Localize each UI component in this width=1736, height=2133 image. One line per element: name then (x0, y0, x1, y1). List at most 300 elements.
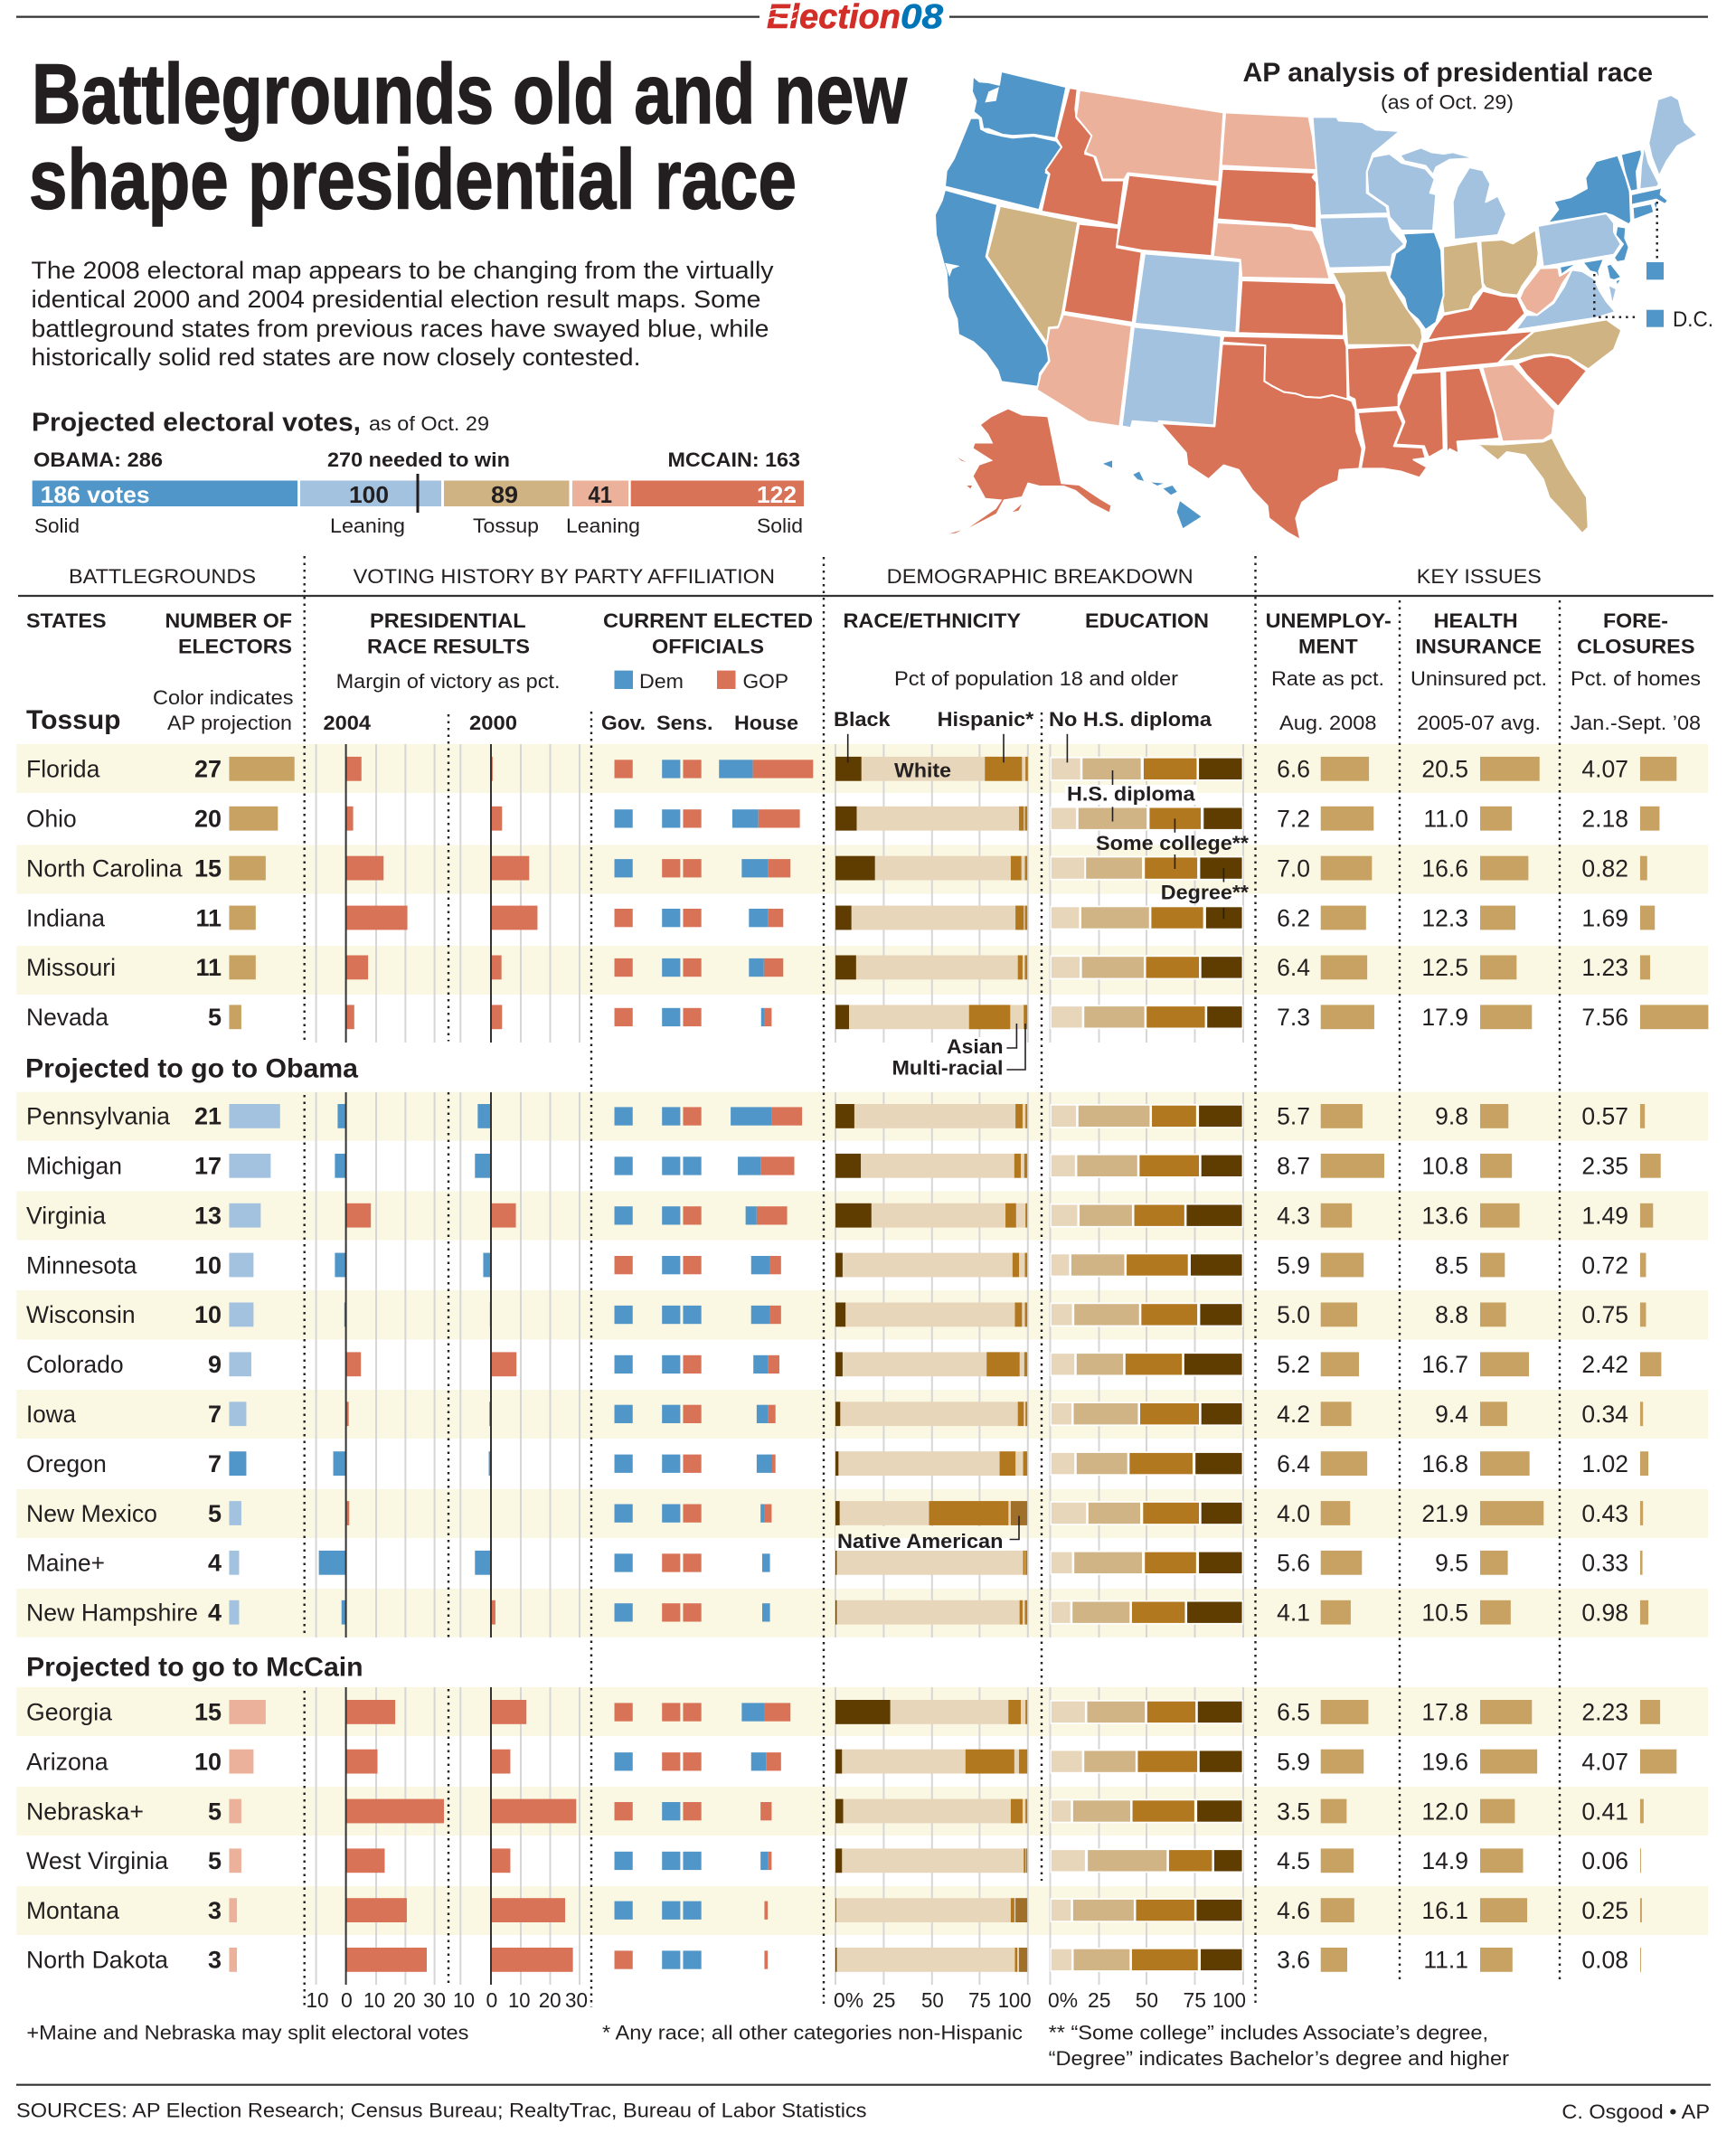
column headers: OFFICIALS (652, 635, 764, 658)
elector bar (229, 1600, 239, 1625)
totals labels: MCCAIN: 163 (667, 448, 800, 471)
row: West Virginia (26, 1847, 1641, 1874)
axis labels: percent: 75 (968, 1988, 991, 2012)
race bar (835, 906, 1027, 930)
sources and credit (16, 2100, 1710, 2123)
issue values (1277, 1748, 1628, 1775)
row: Wisconsin (26, 1301, 1646, 1328)
issue values (1277, 1699, 1628, 1726)
state name: Nebraska+ (26, 1798, 144, 1825)
row: Florida (26, 756, 1676, 783)
issue values: 11.0 (1423, 806, 1468, 833)
issue values: 20.5 (1421, 756, 1468, 783)
axis labels: percent: 50 (921, 1988, 944, 2012)
issue values (1277, 1599, 1628, 1626)
intro paragraph (31, 257, 774, 371)
state name: New Mexico (26, 1500, 157, 1527)
elected officials (615, 1950, 768, 1969)
issue values: 3.5 (1277, 1798, 1310, 1825)
race bar (835, 856, 1027, 881)
elected officials (615, 1752, 781, 1770)
elected officials (615, 1703, 790, 1722)
race bar (835, 1005, 1027, 1029)
issue bars (1321, 1551, 1643, 1575)
stacked electoral bar: 186 votes (41, 481, 150, 508)
electors: 10 (194, 1301, 222, 1328)
elected officials (615, 1355, 779, 1373)
issue values (1277, 756, 1628, 783)
map: AP projection by state (935, 71, 1697, 540)
Rhode Island and D.C. callouts: D.C. (1673, 307, 1713, 332)
education bar (1051, 1005, 1243, 1029)
issue values: 4.07 (1581, 1748, 1628, 1775)
elector bar (229, 1352, 251, 1376)
margin bars (346, 1501, 349, 1525)
intro paragraph: battleground states from previous races have swayed blue, while (31, 315, 769, 342)
margin bars (337, 1104, 491, 1128)
issue bars (1321, 807, 1659, 831)
axis labels: percent: 0% (834, 1988, 863, 2012)
education bar (1051, 856, 1243, 881)
race bar (835, 1750, 1027, 1774)
issue values (1277, 1401, 1628, 1428)
issue values: 16.1 (1421, 1897, 1468, 1924)
state name: Ohio (26, 806, 77, 833)
race bar (835, 1799, 1027, 1823)
state name: New Hampshire (26, 1599, 198, 1626)
issue values: 0.98 (1581, 1599, 1628, 1626)
issue values: 16.6 (1421, 854, 1468, 882)
race bar (835, 1302, 1027, 1326)
race bar (835, 1154, 1027, 1178)
issue values: 8.8 (1435, 1301, 1468, 1328)
education bar (1051, 1799, 1243, 1823)
issue bars (1321, 1203, 1653, 1228)
elector bar (229, 1104, 280, 1128)
race bar (835, 1948, 1027, 1972)
group heading: Obama: Projected to go to Obama (25, 1054, 358, 1084)
electoral votes heading: as of Oct. 29 (369, 412, 489, 435)
issue bars (1321, 1005, 1708, 1029)
education legend labels (1049, 708, 1249, 919)
section headings: VOTING HISTORY BY PARTY AFFILIATION (354, 565, 775, 588)
bar segment labels: Tossup (473, 514, 539, 537)
axis labels: percent: 75 (1183, 1988, 1206, 2012)
issue values: 8.7 (1277, 1153, 1310, 1180)
elector bar (229, 1501, 241, 1525)
education bar (1051, 1253, 1243, 1277)
electors: 11 (195, 954, 222, 981)
stacked electoral bar (33, 474, 804, 513)
column headers: RACE RESULTS (367, 635, 530, 658)
axis labels: margin of victory: 0 (486, 1988, 497, 2012)
issue values: 4.6 (1277, 1897, 1310, 1924)
state name: Michigan (26, 1153, 122, 1180)
column headers: CURRENT ELECTED (603, 609, 813, 632)
race bar (835, 1352, 1027, 1376)
title: shape presidential race (29, 132, 797, 226)
electors: 11 (195, 904, 222, 931)
elector bar (229, 807, 278, 831)
column sub-headers (153, 667, 1701, 734)
issue values: 5.9 (1277, 1748, 1310, 1775)
map heading (1242, 58, 1653, 114)
education legend labels: Some college** (1096, 832, 1249, 854)
issue values: 5.7 (1277, 1103, 1310, 1130)
issue bars (1321, 1750, 1676, 1774)
margin bars (334, 1451, 491, 1476)
elector bar (229, 1551, 239, 1575)
issue values: 13.6 (1421, 1202, 1468, 1229)
race bar (835, 1104, 1027, 1128)
state name: Iowa (26, 1401, 77, 1428)
race bar (835, 955, 1027, 979)
electors: 4 (208, 1550, 222, 1577)
elector bar (229, 955, 256, 979)
issue values: 8.5 (1435, 1251, 1468, 1279)
row: Indiana (26, 904, 1655, 931)
state name: Oregon (26, 1450, 107, 1477)
chart sub-headers: 2000 (469, 712, 517, 734)
issue values: 2.42 (1581, 1351, 1628, 1378)
stacked electoral bar: 41 (588, 481, 612, 508)
issue values: 9.8 (1435, 1103, 1468, 1130)
issue bars (1321, 757, 1676, 781)
electors: 5 (208, 1004, 222, 1031)
intro paragraph: historically solid red states are now closely contested. (31, 344, 640, 371)
issue values: 0.72 (1581, 1251, 1628, 1279)
row: Georgia (26, 1699, 1660, 1726)
electors: 9 (208, 1351, 222, 1378)
issue values: 7.0 (1277, 854, 1310, 882)
issue values: 4.2 (1277, 1401, 1310, 1428)
issue bars (1321, 1600, 1648, 1625)
column headers (26, 609, 1694, 658)
education bar (1051, 757, 1243, 781)
elected officials (615, 859, 790, 877)
stacked electoral bar: 89 (491, 481, 518, 508)
column sub-headers: AP projection (167, 712, 292, 734)
party legend: Dem (639, 670, 684, 693)
education legend labels: H.S. diploma (1067, 783, 1195, 805)
axis labels: margin of victory: 30 (423, 1988, 446, 2012)
issue values: 1.23 (1581, 954, 1628, 981)
education bar (1051, 1154, 1243, 1178)
issue values (1277, 1798, 1628, 1825)
issue values: 4.07 (1581, 756, 1628, 783)
title (29, 46, 908, 226)
row: Pennsylvania (26, 1103, 1645, 1130)
axis labels: percent: 100 (1212, 1988, 1246, 2012)
race bar (835, 1551, 1027, 1575)
education bar (1051, 1501, 1243, 1525)
row: Michigan (26, 1153, 1661, 1180)
issue values: 6.4 (1277, 954, 1310, 981)
state name: Arizona (26, 1748, 109, 1775)
elector bar (229, 1253, 253, 1277)
axis labels: percent (834, 1988, 1246, 2012)
issue values: 0.43 (1581, 1500, 1628, 1527)
issue values: 5.6 (1277, 1550, 1310, 1577)
elected officials (615, 1156, 795, 1175)
axis labels: percent: 50 (1136, 1988, 1158, 2012)
electors: 5 (208, 1798, 222, 1825)
elector bar (229, 1898, 237, 1922)
chart sub-headers (324, 712, 798, 734)
issue values: 7.2 (1277, 806, 1310, 833)
margin bars (346, 906, 537, 930)
elector bar (229, 1451, 246, 1476)
elector bar (229, 906, 256, 930)
column sub-headers: Aug. 2008 (1279, 712, 1376, 734)
stacked electoral bar: 100 (349, 481, 389, 508)
issue values: 0.57 (1581, 1103, 1628, 1130)
elector bar (229, 1948, 237, 1972)
issue values: 14.9 (1421, 1847, 1468, 1874)
intro paragraph: The 2008 electoral map appears to be changing from the virtually (31, 257, 774, 284)
issue values (1277, 1947, 1628, 1974)
margin bars (319, 1551, 491, 1575)
issue values: 0.41 (1581, 1798, 1628, 1825)
column sub-headers: Pct of population 18 and older (894, 667, 1178, 690)
row: Nebraska (26, 1798, 1644, 1825)
elector bar (229, 1799, 241, 1823)
margin bars (346, 807, 502, 831)
section headings: DEMOGRAPHIC BREAKDOWN (887, 565, 1194, 588)
intro paragraph: identical 2000 and 2004 presidential election result maps. Some (31, 286, 761, 313)
state name: Maine+ (26, 1550, 105, 1577)
margin bars (346, 1352, 516, 1376)
issue values: 17.9 (1421, 1004, 1468, 1031)
issue values: 5.9 (1277, 1251, 1310, 1279)
row: Iowa (26, 1401, 1643, 1428)
column headers: CLOSURES (1577, 635, 1694, 658)
electors: 27 (194, 756, 222, 783)
elected officials (615, 1852, 771, 1870)
issue values (1277, 1500, 1628, 1527)
race legend labels: Hispanic* (938, 708, 1034, 731)
column sub-headers: Pct. of homes (1571, 667, 1701, 690)
header rule (16, 16, 1708, 18)
title: Battlegrounds old and new (32, 46, 908, 141)
issue values: 11.1 (1423, 1947, 1468, 1974)
elected officials (615, 760, 813, 779)
elector bar (229, 1154, 270, 1178)
elected officials (615, 1206, 788, 1224)
issue bars (1321, 1700, 1660, 1724)
education bar (1051, 1104, 1243, 1128)
state name: Missouri (26, 954, 116, 981)
issue bars (1321, 1154, 1661, 1178)
axis labels: margin of victory: 10 (508, 1988, 530, 2012)
issue values: 5.0 (1277, 1301, 1310, 1328)
footnotes: ** “Some college” includes Associate’s degree, (1049, 2022, 1488, 2044)
electors: 20 (194, 806, 222, 833)
electors: 15 (194, 854, 222, 882)
electoral votes panel (32, 409, 804, 537)
elector bar (229, 1700, 266, 1724)
electoral votes heading (32, 409, 489, 438)
race bar (835, 1600, 1027, 1625)
axis labels: margin of victory: 30 (565, 1988, 588, 2012)
elected officials (615, 1405, 776, 1423)
elector bar (229, 856, 266, 881)
section headings (69, 565, 1542, 588)
state name: Wisconsin (26, 1301, 136, 1328)
issue values: 0.34 (1581, 1401, 1628, 1428)
issue bars (1321, 906, 1655, 930)
issue values: 0.08 (1581, 1947, 1628, 1974)
column sub-headers: Uninsured pct. (1410, 667, 1547, 690)
elector bar (229, 757, 295, 781)
issue values: 0.06 (1581, 1847, 1628, 1874)
issue values: 17.8 (1421, 1699, 1468, 1726)
electors: 3 (208, 1897, 222, 1924)
row: Montana (26, 1897, 1642, 1924)
row: Minnesota (26, 1251, 1646, 1279)
map heading: AP analysis of presidential race (1242, 58, 1653, 88)
state name: Minnesota (26, 1251, 137, 1279)
race bar (835, 1501, 1027, 1525)
totals labels (33, 448, 800, 471)
education bar (1051, 906, 1243, 930)
race legend labels: Black (834, 708, 891, 731)
issue bars (1321, 1501, 1643, 1525)
margin bars (346, 1402, 491, 1426)
issue values: 1.02 (1581, 1450, 1628, 1477)
axis labels: margin of victory: 20 (393, 1988, 416, 2012)
issue values: 7.3 (1277, 1004, 1310, 1031)
issue bars (1321, 1848, 1641, 1873)
column headers: NUMBER OF (165, 609, 292, 632)
issue values: 2.35 (1581, 1153, 1628, 1180)
chart sub-headers: 2004 (324, 712, 372, 734)
issue values (1277, 1550, 1628, 1577)
electors: 7 (208, 1450, 222, 1477)
axis labels: margin of victory: 10 (453, 1988, 475, 2012)
issue bars (1321, 1451, 1648, 1476)
issue values (1277, 954, 1628, 981)
totals labels: 270 needed to win (327, 448, 510, 471)
issue values: 4.0 (1277, 1500, 1310, 1527)
issue values: 16.7 (1421, 1351, 1468, 1378)
column sub-headers: Margin of victory as pct. (336, 670, 561, 693)
issue values: 9.5 (1435, 1550, 1468, 1577)
row: Ohio (26, 805, 1659, 832)
electors: 10 (194, 1251, 222, 1279)
margin bars (346, 1700, 526, 1724)
column sub-headers: Color indicates (153, 686, 293, 709)
axis labels: margin of victory: 10 (363, 1988, 385, 2012)
issue values: 12.5 (1421, 954, 1468, 981)
issue bars (1321, 856, 1647, 881)
row: Colorado (26, 1351, 1661, 1378)
axis labels: margin of victory (306, 1988, 588, 2012)
axis labels: percent: 25 (1088, 1988, 1110, 2012)
row: Maine (26, 1550, 1643, 1577)
electors: 4 (208, 1599, 222, 1626)
sources and credit: SOURCES: AP Election Research; Census Bureau; RealtyTrac, Bureau of Labor Statistics (16, 2100, 866, 2122)
western states, Alaska and Hawaii (935, 71, 1363, 540)
elected officials (615, 958, 783, 977)
state name: Colorado (26, 1351, 124, 1378)
elected officials (615, 1008, 771, 1026)
column headers: ELECTORS (178, 635, 292, 658)
issue values: 6.2 (1277, 904, 1310, 931)
margin bars (346, 955, 502, 979)
elected officials (615, 1455, 776, 1473)
issue values: 2.23 (1581, 1699, 1628, 1726)
footnotes (26, 2022, 1509, 2070)
education bar (1051, 1551, 1243, 1575)
issue values (1277, 1301, 1628, 1328)
issue values: 4.5 (1277, 1847, 1310, 1874)
row: North Carolina (26, 854, 1647, 882)
race legend labels: Native American (837, 1530, 1004, 1553)
electors: 10 (194, 1748, 222, 1775)
row: New Mexico (26, 1500, 1643, 1527)
elected officials (615, 1505, 771, 1523)
education bar (1051, 1203, 1243, 1228)
Rhode Island and D.C. callouts (1594, 202, 1713, 332)
issue values: 0.75 (1581, 1301, 1628, 1328)
chart sub-headers: Gov. (601, 712, 646, 734)
state name: Virginia (26, 1202, 107, 1229)
section headings: BATTLEGROUNDS (69, 565, 256, 588)
row: Nevada (26, 1004, 1708, 1031)
state name: West Virginia (26, 1847, 169, 1874)
issue values: 12.3 (1421, 904, 1468, 931)
bar segment labels: Leaning (566, 514, 640, 537)
column headers: INSURANCE (1415, 635, 1542, 658)
margin bars (346, 1948, 573, 1972)
axis labels: margin of victory: 0 (341, 1988, 353, 2012)
chart sub-headers: House (734, 712, 798, 734)
column headers: RACE/ETHNICITY (843, 609, 1021, 632)
state name: Montana (26, 1897, 120, 1924)
elector bar (229, 1848, 241, 1873)
education bar (1051, 1451, 1243, 1476)
issue values: 6.5 (1277, 1699, 1310, 1726)
margin bars (346, 1005, 502, 1029)
column sub-headers: Jan.-Sept. ’08 (1571, 712, 1701, 734)
margin bars (335, 1154, 491, 1178)
stacked electoral bar: 122 (757, 481, 797, 508)
race legend labels: Asian (947, 1035, 1004, 1058)
race bar (835, 1848, 1027, 1873)
elected officials (615, 1256, 781, 1274)
margin bars (346, 1848, 510, 1873)
bar segment labels: Solid (757, 514, 803, 537)
education bar (1051, 807, 1243, 831)
race bar (835, 1451, 1027, 1476)
education bar (1051, 1848, 1243, 1873)
issue values: 21.9 (1421, 1500, 1468, 1527)
education bar (1051, 1750, 1243, 1774)
axis labels: margin of victory: 20 (539, 1988, 561, 2012)
education legend labels: No H.S. diploma (1049, 708, 1212, 731)
education bar (1051, 1302, 1243, 1326)
state name: Florida (26, 756, 100, 783)
issue values: 0.33 (1581, 1550, 1628, 1577)
axis labels: margin of victory: 10 (306, 1988, 329, 2012)
issue values: 6.6 (1277, 756, 1310, 783)
issue values: 2.18 (1581, 806, 1628, 833)
race legend labels: White (894, 760, 951, 781)
issue values (1277, 854, 1628, 882)
group heading: McCain: Projected to go to McCain (26, 1653, 363, 1682)
issue values: 9.4 (1435, 1401, 1468, 1428)
